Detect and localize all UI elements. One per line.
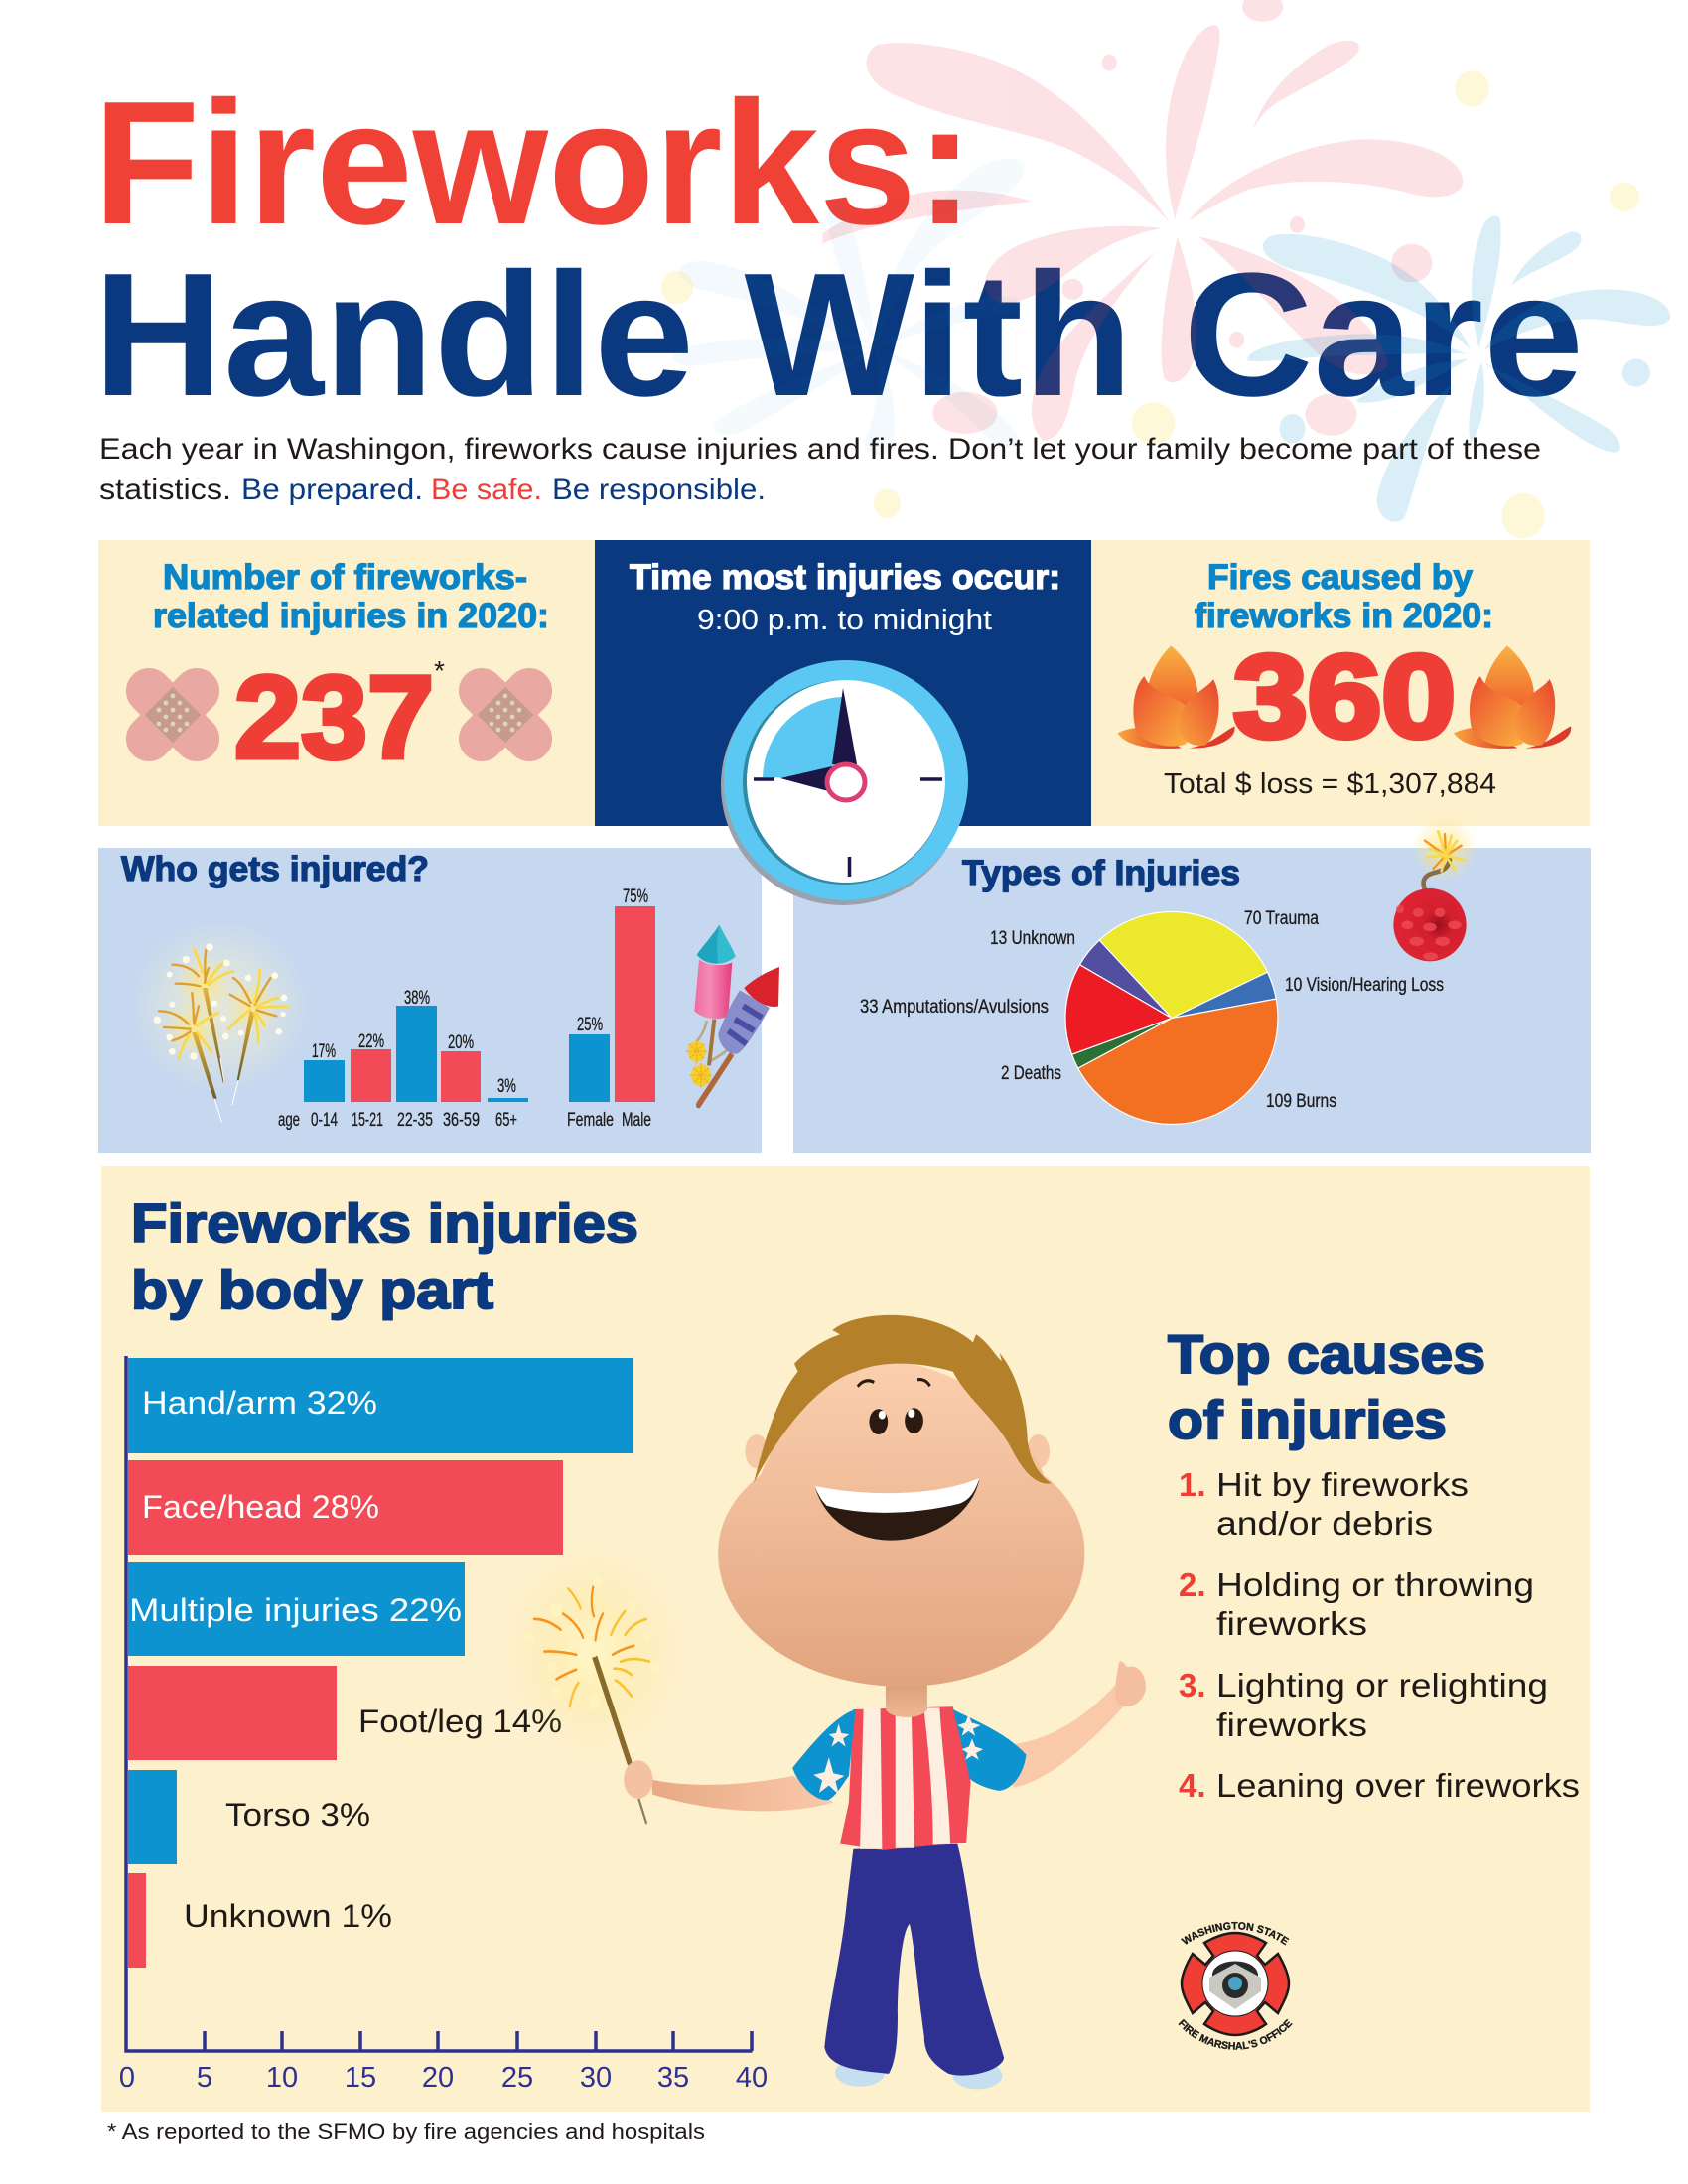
list: top causes: Hit by fireworks [1216, 1466, 1469, 1503]
icon: rockets [686, 925, 779, 1108]
pie labels: 70 Trauma [1244, 908, 1319, 929]
pie labels: 2 Deaths [1001, 1063, 1061, 1084]
heading: top causes: of injuries [1168, 1389, 1447, 1450]
icon: sparklers [131, 920, 310, 1122]
logo: fire marshal: FIRE MARSHAL'S OFFICE [1178, 2019, 1293, 2050]
bar chart: age: 15-21 [352, 1110, 383, 1131]
logo: fire marshal [1178, 1922, 1293, 2050]
bar chart: body part: 25 [501, 2062, 533, 2094]
bar chart: body part: Unknown 1% [184, 1898, 392, 1934]
pie labels: 13 Unknown [990, 928, 1075, 949]
list: top causes: and/or debris [1216, 1505, 1433, 1542]
mouth [815, 1478, 980, 1541]
intro text: Be safe. [431, 474, 542, 506]
panel: body part and causes [101, 1166, 1590, 2112]
list: top causes: fireworks [1216, 1706, 1367, 1743]
eyebrows [858, 1380, 930, 1387]
bar chart: age: 38% [404, 988, 430, 1009]
bar chart: body part: Multiple injuries 22% [129, 1592, 462, 1628]
bar chart: gender: Male [622, 1110, 651, 1131]
pie labels: 109 Burns [1266, 1091, 1336, 1112]
panel: types of injuries [793, 816, 1591, 1153]
heading: time: Time most injuries occur: [630, 558, 1060, 597]
bar chart: age: 65+ [495, 1110, 517, 1131]
bar chart: age: 22-35 [397, 1110, 433, 1131]
icon: bandage left [116, 658, 229, 771]
bar chart: body part: 10 [266, 2062, 298, 2094]
bar chart: body part: 0 [119, 2062, 135, 2094]
icon: bomb [1393, 816, 1477, 961]
icon: flame left [1118, 646, 1235, 749]
logo: fire marshal: WASHINGTON STATE [1181, 1922, 1289, 1946]
pie chart [1065, 911, 1278, 1124]
bar chart: body part: Face/head 28% [142, 1489, 379, 1525]
shoes [835, 2059, 885, 2087]
title: Handle With Care [93, 236, 1584, 433]
bar chart: age: 36-59 [443, 1110, 480, 1131]
bar chart: age [278, 988, 528, 1131]
title: Fireworks: [93, 65, 974, 261]
bar chart: body part: 30 [580, 2062, 612, 2094]
bar chart: gender: 25% [577, 1015, 603, 1035]
heading: body part [131, 1192, 638, 1320]
bar chart: body part: 5 [197, 2062, 212, 2094]
list: top causes: 3. [1179, 1667, 1206, 1704]
illustration: boy with sparkler [504, 1315, 1146, 2089]
list: top causes: 1. [1179, 1466, 1206, 1503]
intro text: Be prepared. [241, 474, 423, 506]
bar chart: body part: 40 [736, 2062, 768, 2094]
bar chart: age: 0-14 [311, 1110, 338, 1131]
footnote asterisk: * [434, 655, 445, 686]
number 360: 360 [1233, 631, 1456, 762]
time range: 9:00 p.m. to midnight [697, 605, 992, 636]
list: top causes: Leaning over fireworks [1216, 1767, 1580, 1804]
list: top causes: fireworks [1216, 1605, 1367, 1642]
heading: top causes: Top causes [1168, 1323, 1485, 1385]
heading: injuries: Number of fireworks- [163, 558, 527, 597]
heading: fires [1195, 558, 1493, 635]
intro text: statistics. [99, 474, 231, 506]
bar chart: body part: 15 [345, 2062, 376, 2094]
eyes [869, 1408, 923, 1434]
heading: who: Who gets injured? [121, 850, 429, 888]
bar chart: body part: Torso 3% [225, 1797, 370, 1833]
bar chart: age: 20% [448, 1032, 474, 1053]
intro text: Each year in Washingon, fireworks cause injuries and fires. Don’t let your family become part of these [99, 433, 1541, 466]
bar chart: age: 17% [312, 1041, 336, 1062]
bar chart: age: 3% [497, 1076, 516, 1097]
heading: body part: Fireworks injuries [131, 1192, 638, 1254]
panel: number of injuries [98, 540, 595, 826]
neck [886, 1683, 927, 1717]
bar chart: gender [567, 887, 655, 1131]
bar chart: gender: Female [567, 1110, 614, 1131]
icon: flame right [1454, 646, 1571, 749]
right arm [1013, 1686, 1128, 1788]
list: top causes: 2. [1179, 1567, 1206, 1603]
bar chart: body part: Foot/leg 14% [358, 1704, 562, 1739]
head [718, 1361, 1084, 1687]
left arm [651, 1776, 833, 1811]
bar chart: body part: 35 [657, 2062, 689, 2094]
heading: injuries: related injuries in 2020: [153, 597, 549, 635]
hair [754, 1315, 1052, 1484]
bar chart: body part: Hand/arm 32% [142, 1385, 377, 1421]
list: top causes: Holding or throwing [1216, 1567, 1534, 1603]
sparkler [504, 1552, 682, 1823]
panel: who gets injured [98, 848, 779, 1153]
pie labels: 33 Amputations/Avulsions [860, 997, 1049, 1018]
heading: fires: fireworks in 2020: [1195, 597, 1493, 635]
icon: bandage right [449, 658, 562, 771]
number 237: 237 [234, 652, 434, 783]
list: top causes [1179, 1466, 1580, 1804]
shirt [792, 1706, 1026, 1850]
bar chart: age: age [278, 1110, 300, 1131]
intro text: Be responsible. [552, 474, 766, 506]
bar chart: body part [119, 1356, 768, 2094]
bar chart: gender: 75% [623, 887, 648, 907]
panel: time of injuries [595, 540, 1091, 826]
title [93, 65, 1584, 433]
bar chart: age: 22% [358, 1031, 384, 1052]
pie labels [860, 908, 1444, 1112]
heading: fires: Fires caused by [1207, 558, 1474, 597]
heading: top causes [1168, 1323, 1485, 1450]
list: top causes: Lighting or relighting [1216, 1667, 1548, 1704]
heading: body part: by body part [131, 1259, 493, 1320]
bar chart: body part: 20 [422, 2062, 454, 2094]
panel: fires [1091, 540, 1590, 826]
heading: types: Types of Injuries [962, 854, 1240, 892]
pie labels: 10 Vision/Hearing Loss [1285, 975, 1444, 996]
list: top causes: 4. [1179, 1767, 1206, 1804]
pants [824, 1843, 1004, 2076]
ears [745, 1434, 769, 1468]
background fireworks [661, 0, 1670, 538]
heading: injuries [153, 558, 549, 635]
icon: clock [721, 660, 968, 905]
intro text [99, 433, 1541, 506]
total loss: Total $ loss = $1,307,884 [1164, 768, 1496, 800]
footnote: * As reported to the SFMO by fire agencies and hospitals [107, 2119, 705, 2144]
